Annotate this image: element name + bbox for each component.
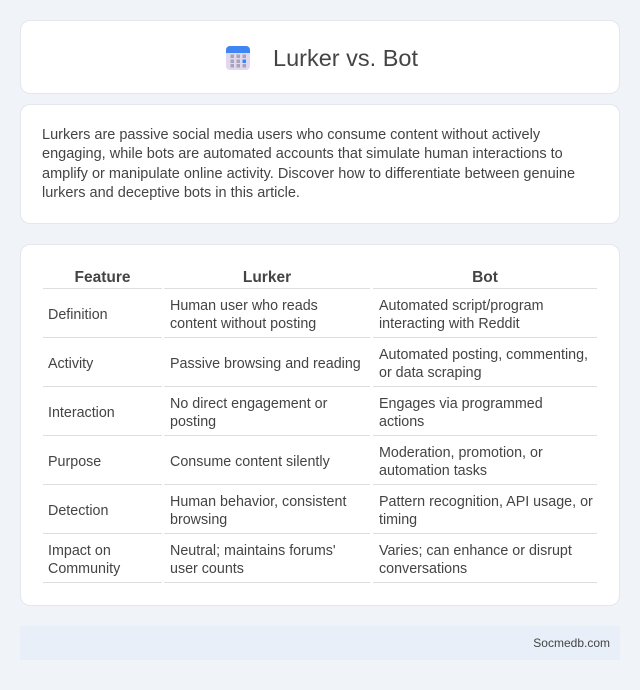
row: Definition bot: interacting with Reddit: [379, 316, 520, 332]
row: Interaction bot: Engages via programmed: [379, 396, 543, 412]
row: Definition bot: [379, 298, 543, 332]
row: Activity bot: Automated posting, commenting,: [379, 347, 588, 363]
row: Impact lurker: [170, 543, 336, 577]
row: Impact bot: Varies; can enhance or disrupt: [379, 543, 572, 559]
row: Detection lurker: Human behavior, consistent: [170, 494, 346, 510]
panel: comparison table card: [20, 244, 620, 606]
row: Definition label: Definition: [48, 307, 108, 323]
row: Interaction lurker: No direct engagement or: [170, 396, 327, 412]
row: Detection bot: [379, 494, 593, 528]
footer text: Socmedb.com: [533, 636, 610, 650]
panel: title card: [20, 20, 620, 94]
row: Impact bot: [379, 543, 572, 577]
row: Interaction bot: [379, 396, 543, 430]
intro text: engaging, while bots are automated accounts that simulate human interactions to: [42, 146, 563, 162]
table header: Feature: Feature: [74, 269, 130, 286]
row: Activity bot: or data scraping: [379, 365, 482, 381]
title: Lurker vs. Bot: [273, 45, 418, 71]
icon: calendar: [226, 46, 250, 70]
row: Detection lurker: browsing: [170, 512, 227, 528]
row: Definition lurker: Human user who reads: [170, 298, 318, 314]
row: Purpose bot: Moderation, promotion, or: [379, 445, 543, 461]
row: Purpose bot: [379, 445, 543, 479]
row: Impact label: [48, 543, 120, 577]
row: Interaction label: Interaction: [48, 405, 115, 421]
table header: Lurker: Lurker: [243, 269, 291, 286]
row: Detection bot: timing: [379, 512, 417, 528]
table header: Bot: Bot: [472, 269, 498, 286]
intro text: lurkers and deceptive bots in this article.: [42, 185, 300, 201]
row: Purpose bot: automation tasks: [379, 463, 487, 479]
row: Impact lurker: Neutral; maintains forums': [170, 543, 336, 559]
row: Impact label: Community: [48, 561, 120, 577]
row: Detection lurker: [170, 494, 346, 528]
intro text: Lurkers are passive social media users who consume content without actively: [42, 127, 540, 143]
row: Interaction bot: actions: [379, 414, 424, 430]
row: Impact label: Impact on: [48, 543, 111, 559]
row: Interaction lurker: [170, 396, 328, 430]
row: Detection bot: Pattern recognition, API usage, or: [379, 494, 593, 510]
row: Impact bot: conversations: [379, 561, 467, 577]
intro text: [42, 127, 575, 201]
row: Purpose lurker: Consume content silently: [170, 454, 330, 470]
row: Activity lurker: Passive browsing and reading: [170, 356, 361, 372]
intro text: amplify or manipulate online activity. Discover how to differentiate between genuine: [42, 166, 575, 182]
row: Definition lurker: content without posting: [170, 316, 316, 332]
row: Interaction lurker: posting: [170, 414, 216, 430]
row: Activity label: Activity: [48, 356, 93, 372]
row: Detection label: Detection: [48, 503, 108, 519]
row: Activity bot: [379, 347, 588, 381]
row: Impact lurker: user counts: [170, 561, 244, 577]
row: Definition lurker: [170, 298, 318, 332]
footer bar: [20, 626, 620, 660]
row: Purpose label: Purpose: [48, 454, 101, 470]
row: Definition bot: Automated script/program: [379, 298, 543, 314]
panel: intro card: [20, 104, 620, 224]
